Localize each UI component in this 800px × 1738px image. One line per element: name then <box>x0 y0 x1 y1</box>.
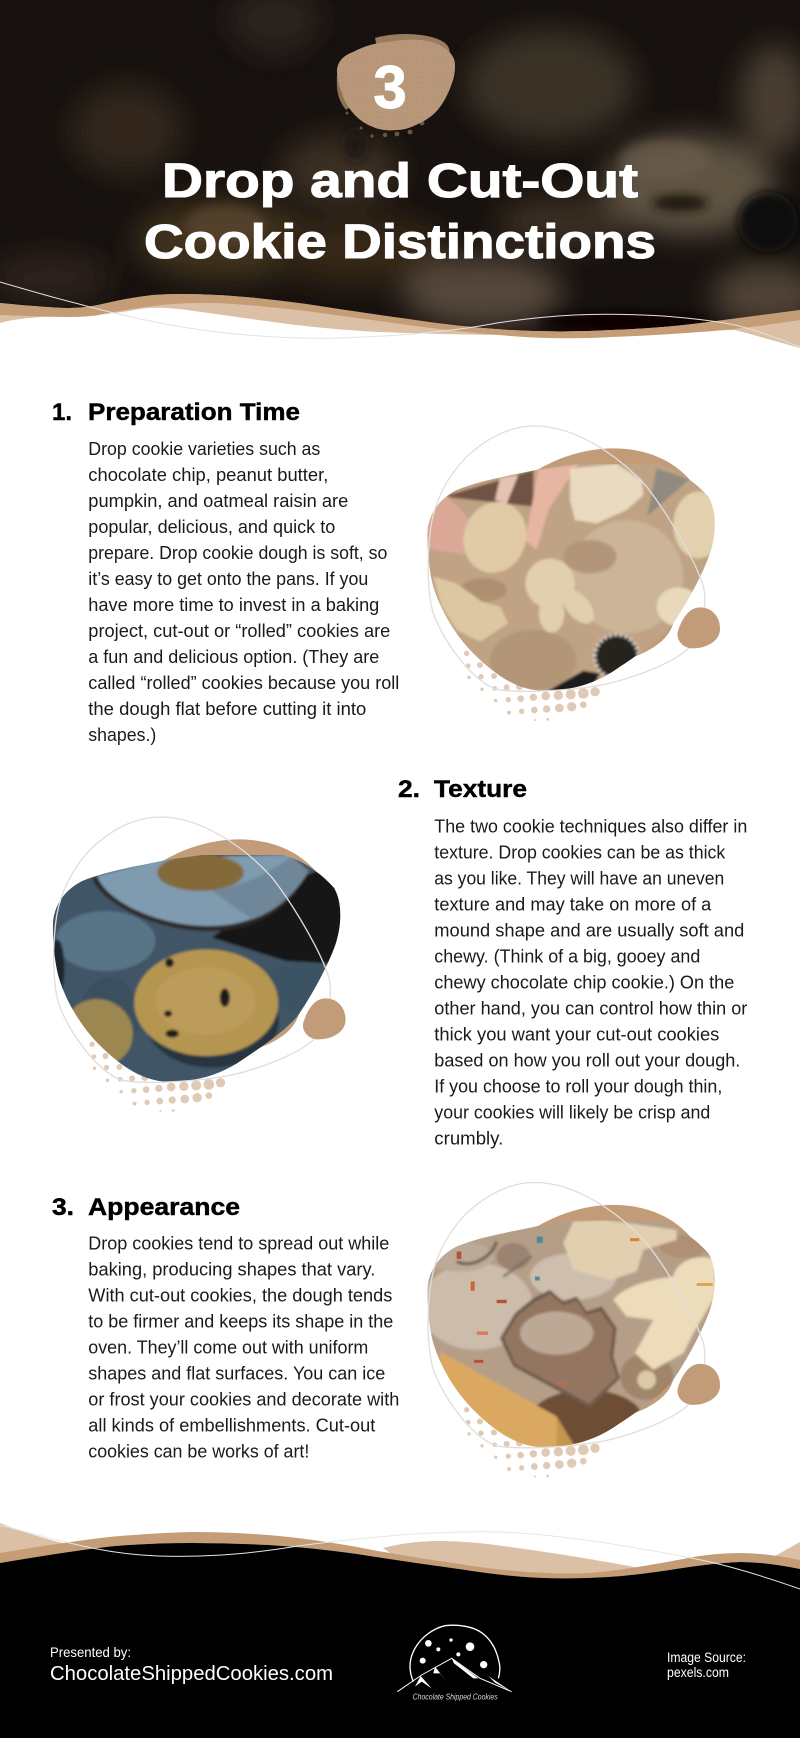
footer logo: Chocolate Shipped Cookies <box>413 1691 498 1701</box>
body text 1: a fun and delicious option. (They are <box>88 646 379 667</box>
body text 3: baking, producing shapes that vary. <box>88 1258 375 1279</box>
header wave: tan bands <box>0 282 800 400</box>
body text 1: Drop cookie varieties such as <box>88 438 320 459</box>
body text 2: chewy chocolate chip cookie.) On the <box>434 971 734 992</box>
footer image source: pexels.com <box>667 1665 729 1680</box>
body text 1: have more time to invest in a baking <box>88 594 379 615</box>
title <box>144 155 656 269</box>
body text 3: shapes and flat surfaces. You can ice <box>88 1362 385 1383</box>
image blob 2: cookies on blue slate <box>45 817 346 1112</box>
body text 2: The two cookie techniques also differ in <box>434 815 747 836</box>
body text 1 <box>88 438 399 745</box>
body text 3: With cut-out cookies, the dough tends <box>88 1284 392 1305</box>
title: Drop and Cut-Out <box>162 155 638 208</box>
footer presenter text: Presented by: <box>50 1644 131 1660</box>
body text 1: it’s easy to get onto the pans. If you <box>88 568 368 589</box>
body text 2: If you choose to roll your dough thin, <box>434 1075 722 1096</box>
body text 1: chocolate chip, peanut butter, <box>88 464 328 485</box>
footer presenter text <box>50 1644 333 1685</box>
body text 1: shapes.) <box>88 724 156 745</box>
body text 3: oven. They’ll come out with uniform <box>88 1336 368 1357</box>
number badge <box>337 34 455 138</box>
heading 2: 2. <box>398 776 420 803</box>
heading 1: Preparation Time <box>88 399 300 426</box>
body text 2: other hand, you can control how thin or <box>434 997 747 1018</box>
body text 1: prepare. Drop cookie dough is soft, so <box>88 542 387 563</box>
heading 3: 3. <box>52 1194 74 1221</box>
body text 3: to be firmer and keeps its shape in the <box>88 1310 393 1331</box>
body text 3 <box>88 1232 399 1461</box>
title: Cookie Distinctions <box>144 216 656 269</box>
body text 2: based on how you roll out your dough. <box>434 1049 740 1070</box>
body text 1: project, cut-out or “rolled” cookies are <box>88 620 390 641</box>
body text 3: Drop cookies tend to spread out while <box>88 1232 389 1253</box>
body text 2: texture. Drop cookies can be as thick <box>434 841 726 862</box>
heading 1: 1. <box>52 399 72 426</box>
footer image source: Image Source: <box>667 1650 746 1665</box>
body text 1: the dough flat before cutting it into <box>88 698 366 719</box>
body text 2: texture and may take on more of a <box>434 893 712 914</box>
body text 3: cookies can be works of art! <box>88 1440 309 1461</box>
body text 2: thick you want your cut-out cookies <box>434 1023 719 1044</box>
heading 2 <box>398 776 527 803</box>
body text 1: popular, delicious, and quick to <box>88 516 335 537</box>
body text 1: pumpkin, and oatmeal raisin are <box>88 490 348 511</box>
section 3: Appearance <box>52 1194 399 1461</box>
body text 2: your cookies will likely be crisp and <box>434 1101 710 1122</box>
heading 3: Appearance <box>88 1194 240 1221</box>
body text 3: all kinds of embellishments. Cut-out <box>88 1414 375 1435</box>
body text 3: or frost your cookies and decorate with <box>88 1388 399 1409</box>
footer presenter text: ChocolateShippedCookies.com <box>50 1662 333 1685</box>
body text 2: mound shape and are usually soft and <box>434 919 744 940</box>
footer wave and black background <box>0 1523 800 1738</box>
footer image source <box>667 1650 746 1680</box>
body text 1: called “rolled” cookies because you roll <box>88 672 399 693</box>
footer logo <box>397 1625 512 1701</box>
section 1: Preparation Time <box>52 399 399 745</box>
badge numeral: 3 <box>373 54 407 121</box>
image blob 3: cookie cutter and flour <box>420 1182 720 1477</box>
image blob 1: shaping dough cookies <box>420 426 723 721</box>
body text 2: chewy. (Think of a big, gooey and <box>434 945 700 966</box>
section 2: Texture <box>398 776 747 1148</box>
body text 2: crumbly. <box>434 1127 503 1148</box>
body text 2: as you like. They will have an uneven <box>434 867 724 888</box>
header photo: blurred cookies <box>0 0 800 350</box>
heading 2: Texture <box>434 776 527 803</box>
body text 2 <box>434 815 747 1148</box>
